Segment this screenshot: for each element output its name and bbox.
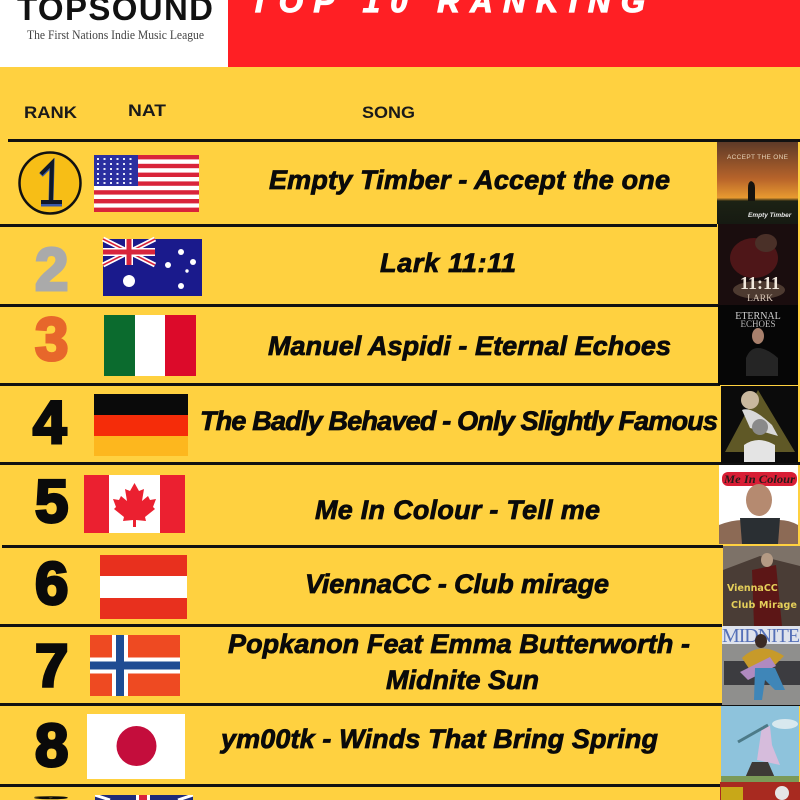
album cover: Winds That Bring Spring [721, 706, 799, 783]
flag: Germany [94, 394, 188, 456]
song title: ym00tk - Winds That Bring Spring [219, 724, 658, 754]
album cover: Club Mirage: ViennaCC [727, 583, 778, 594]
rank 1 badge [20, 152, 80, 214]
song title: Popkanon Feat Emma Butterworth - [228, 629, 690, 659]
header: title banner [228, 0, 800, 67]
row 9 (cropped) [36, 782, 800, 800]
album cover: Club Mirage: Club Mirage [731, 600, 797, 611]
flag: USA [94, 155, 199, 212]
album cover: Accept the One: Empty Timber [748, 212, 792, 219]
column headings [24, 101, 415, 122]
song title: Me In Colour - Tell me [315, 495, 600, 525]
rank 7: 7 [35, 632, 68, 699]
row 2 [35, 224, 798, 305]
flag: Canada [84, 475, 185, 533]
row 6 [35, 546, 800, 626]
album cover: Midnite Sun: MIDNITE [722, 625, 800, 647]
album cover: Accept the One [717, 142, 798, 224]
album cover: Eternal Echoes: ECHOES [740, 319, 776, 329]
rank 2: 2 [35, 236, 68, 303]
flag: Australia [103, 239, 202, 296]
rank 3: 3 [35, 306, 68, 373]
song title: Lark 11:11 [380, 248, 516, 278]
rank 4: 4 [33, 389, 67, 456]
rank 6: 6 [35, 550, 68, 617]
flag: United Kingdom [95, 795, 193, 800]
album cover: Eternal Echoes: ETERNAL [735, 311, 781, 322]
album cover: Accept the One: ACCEPT THE ONE [727, 154, 789, 161]
row 3 [35, 305, 798, 385]
album cover: Tell Me [719, 465, 798, 544]
album cover: 11:11 Lark: 11:11 [740, 273, 780, 293]
song title: Midnite Sun [386, 665, 539, 695]
header: logo block [0, 0, 228, 67]
column headings: RANK [24, 103, 78, 122]
column headings: NAT [128, 101, 167, 120]
album cover: Midnite Sun [722, 625, 800, 705]
album cover: 11:11 Lark: LARK [747, 294, 773, 304]
row 7 [35, 625, 800, 705]
row 4 [33, 386, 798, 463]
album cover: 11:11 Lark [718, 224, 798, 305]
song title: The Badly Behaved - Only Slightly Famous [200, 406, 718, 436]
row 1 [20, 142, 798, 224]
rank 5: 5 [35, 468, 68, 535]
song title: Manuel Aspidi - Eternal Echoes [268, 331, 671, 361]
song title: Empty Timber - Accept the one [269, 165, 670, 195]
row 8 [35, 706, 799, 783]
album cover: Club Mirage [723, 546, 800, 626]
album cover: Only Slightly Famous [721, 386, 798, 463]
flag: Norway [90, 635, 180, 696]
column headings: SONG [362, 103, 415, 122]
flag: Austria [100, 555, 187, 619]
rank 8: 8 [35, 712, 68, 779]
row 5 [35, 465, 798, 544]
song title [228, 629, 690, 695]
album cover (cropped) [720, 782, 800, 800]
album cover: Eternal Echoes [718, 305, 798, 385]
rank 9 (only the top sliver is visible): 9 [36, 796, 67, 800]
header: logo block: The First Nations Indie Music League [27, 28, 204, 42]
flag: Italy [104, 315, 196, 376]
album cover: Tell Me: Me In Colour [723, 472, 795, 486]
flag: Japan [87, 714, 185, 779]
song title: ViennaCC - Club mirage [305, 569, 609, 599]
